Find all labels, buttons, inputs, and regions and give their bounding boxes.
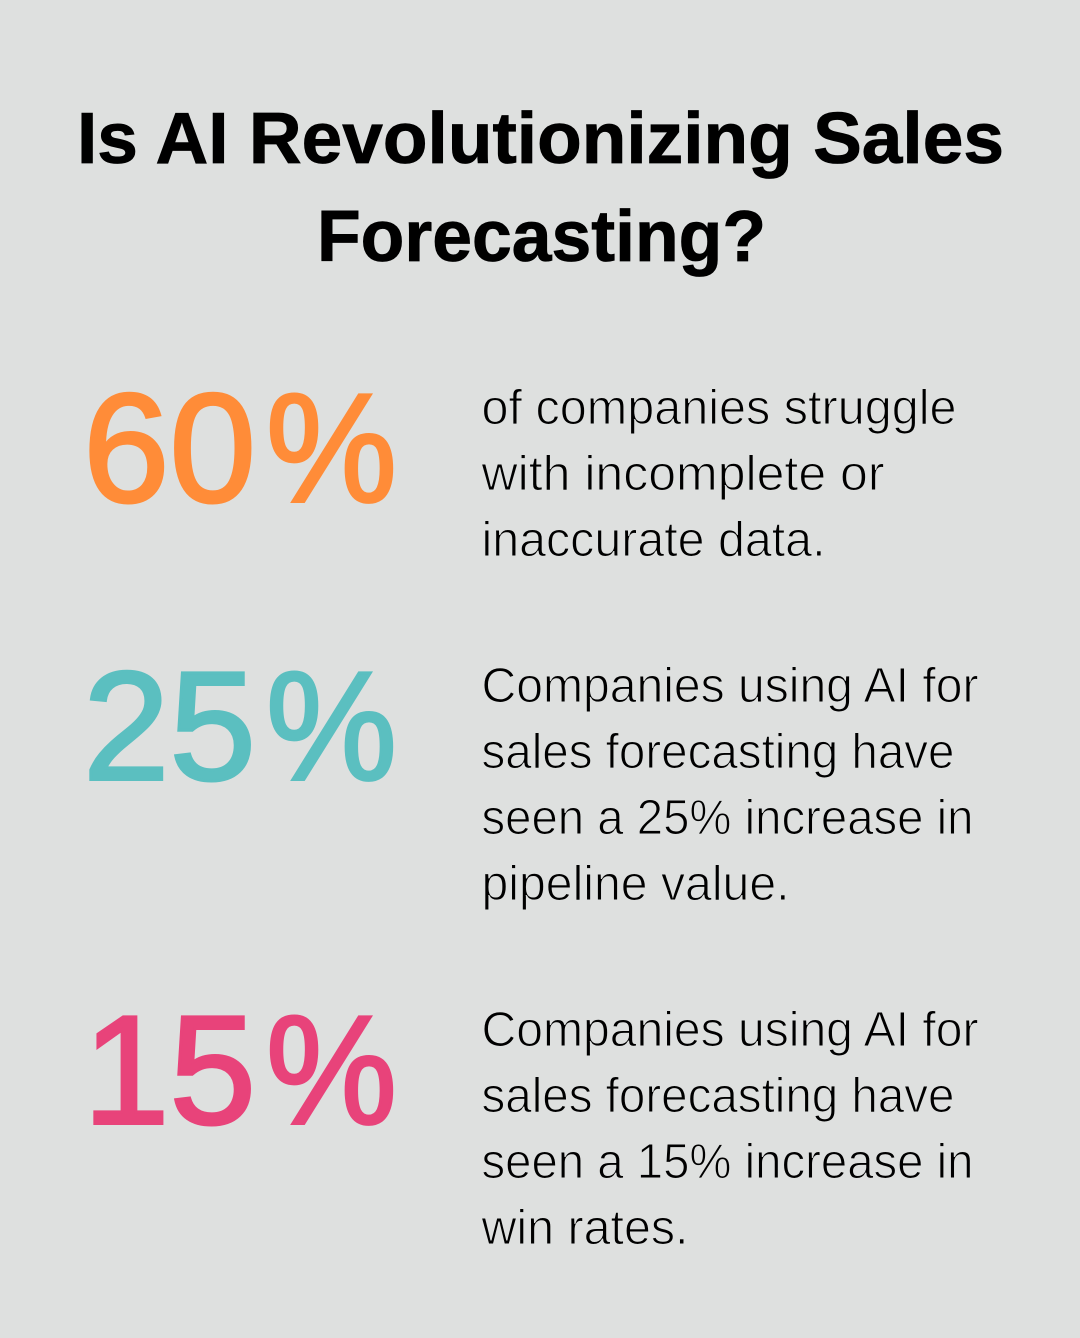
- stat number: 25%: %: [266, 640, 397, 812]
- title: [77, 99, 1004, 277]
- stat row: 60%: [83, 362, 956, 567]
- stat description: 60%: of companies struggle: [482, 381, 956, 435]
- stat description: 15%: seen a 15% increase in: [482, 1135, 974, 1189]
- title: Is AI Revolutionizing Sales: [77, 99, 1004, 179]
- stat description: 25%: seen a 25% increase in: [482, 791, 974, 845]
- stat description: 25%: pipeline value.: [482, 857, 790, 911]
- stat description: 60%: [480, 381, 956, 567]
- stat number: 25%: [83, 640, 397, 812]
- stat description: 15%: sales forecasting have: [482, 1069, 954, 1123]
- stat description: 60%: with incomplete or: [480, 447, 884, 501]
- title: Forecasting?: [317, 197, 766, 277]
- stat row: 25%: [83, 640, 978, 911]
- stat description: 15%: Companies using AI for: [482, 1003, 978, 1057]
- stat number: 60%: 60: [83, 362, 256, 534]
- stat number: 60%: [83, 362, 397, 534]
- stat number: 15%: 15: [83, 984, 256, 1156]
- stat description: 15%: win rates.: [481, 1201, 688, 1255]
- stat number: 25%: 25: [83, 640, 256, 812]
- stat number: 15%: %: [266, 984, 397, 1156]
- stat description: 25%: sales forecasting have: [482, 725, 954, 779]
- stat number: 15%: [83, 984, 397, 1156]
- stat description: 60%: inaccurate data.: [482, 513, 826, 567]
- stat description: 25%: Companies using AI for: [482, 659, 978, 713]
- stat number: 60%: %: [266, 362, 397, 534]
- stat row: 15%: [83, 984, 978, 1255]
- stat description: 15%: [481, 1003, 978, 1255]
- stat description: 25%: [482, 659, 978, 911]
